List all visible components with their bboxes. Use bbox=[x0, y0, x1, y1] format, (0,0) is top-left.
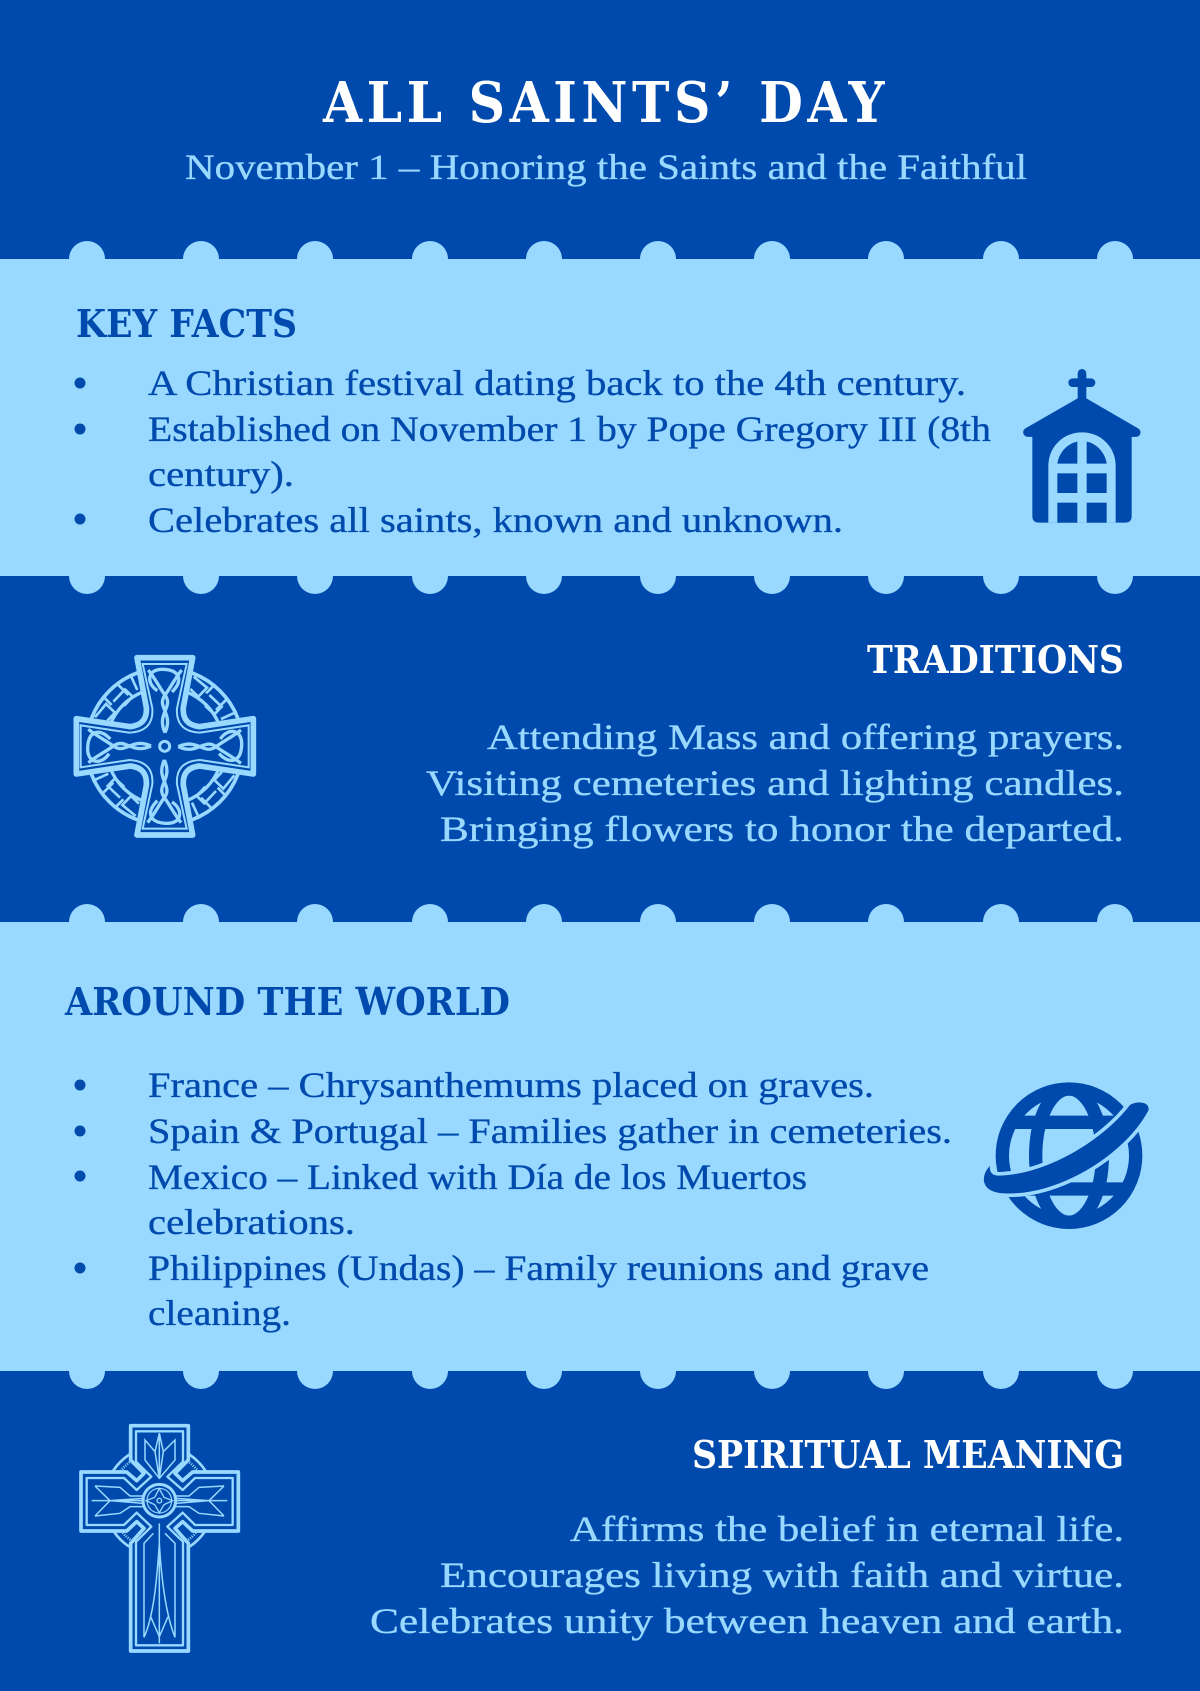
heading: around the world: AROUND THE WORLD bbox=[64, 979, 510, 1024]
bullet list: around the world: Philippines (Undas) – Family reunions and grave bbox=[148, 1248, 929, 1288]
bullet list: key facts: century). bbox=[148, 454, 294, 494]
text block: traditions: Attending Mass and offering prayers. bbox=[487, 717, 1124, 757]
icon: globe with orbit bbox=[984, 1089, 1149, 1222]
text block: traditions bbox=[426, 717, 1124, 849]
panel: spiritual meaning bbox=[0, 1389, 1200, 1691]
icon: ornate cross bbox=[81, 1426, 238, 1651]
text block: spiritual meaning: Celebrates unity between heaven and earth. bbox=[370, 1601, 1124, 1641]
bullet list: key facts: Celebrates all saints, known and unknown. bbox=[148, 500, 843, 540]
panel: key facts bbox=[0, 241, 1200, 594]
text block: spiritual meaning: Encourages living with faith and virtue. bbox=[440, 1555, 1124, 1595]
title: ALL SAINTS’ DAY bbox=[322, 70, 889, 136]
bullet list: around the world: Mexico – Linked with Día de los Muertos bbox=[148, 1157, 807, 1197]
subtitle: November 1 – Honoring the Saints and the Faithful bbox=[185, 147, 1027, 187]
panel: around the world bbox=[0, 904, 1200, 1389]
bullet list: key facts: A Christian festival dating back to the 4th century. bbox=[148, 363, 966, 403]
text block: spiritual meaning: Affirms the belief in eternal life. bbox=[570, 1509, 1124, 1549]
bullet list: around the world: Spain & Portugal – Families gather in cemeteries. bbox=[148, 1111, 952, 1151]
bullet list: around the world bbox=[74, 1065, 952, 1333]
bullet list: key facts bbox=[74, 363, 991, 540]
text block: traditions: Bringing flowers to honor the departed. bbox=[440, 809, 1124, 849]
bullet list: key facts: Established on November 1 by Pope Gregory III (8th bbox=[148, 409, 991, 449]
bullet list: around the world: France – Chrysanthemums placed on graves. bbox=[148, 1065, 874, 1105]
panel: traditions bbox=[0, 594, 1200, 922]
heading: traditions: TRADITIONS bbox=[867, 637, 1124, 682]
text block: spiritual meaning bbox=[370, 1509, 1124, 1641]
text block: traditions: Visiting cemeteries and lighting candles. bbox=[426, 763, 1124, 803]
heading: key facts: KEY FACTS bbox=[76, 301, 297, 346]
panel: header bbox=[0, 0, 1200, 259]
heading: spiritual meaning: SPIRITUAL MEANING bbox=[692, 1432, 1124, 1477]
bullet list: around the world: celebrations. bbox=[148, 1202, 355, 1242]
icon: church bbox=[1028, 373, 1136, 523]
icon: celtic knot cross bbox=[76, 658, 253, 835]
bullet list: around the world: cleaning. bbox=[148, 1293, 291, 1333]
